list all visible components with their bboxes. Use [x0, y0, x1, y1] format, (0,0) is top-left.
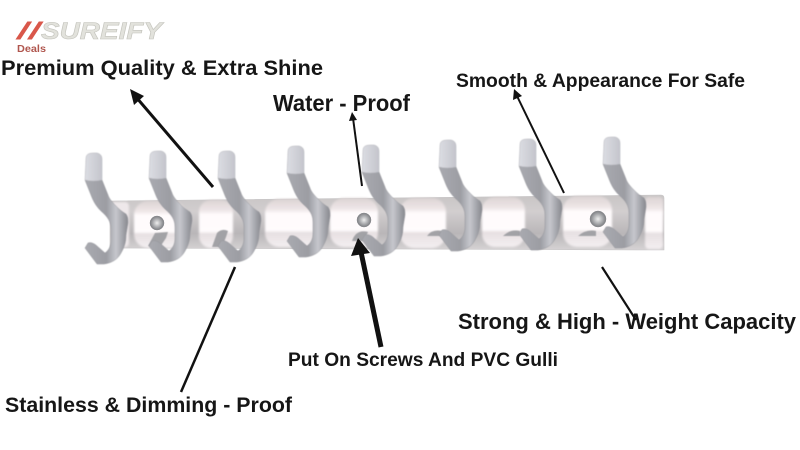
rear hook tips [148, 230, 596, 247]
hook 7 [519, 139, 562, 250]
screws [150, 216, 164, 230]
heading: screws: Put On Screws And PVC Gulli [288, 350, 558, 371]
rail highlights [111, 196, 663, 249]
rail plate [110, 195, 664, 250]
arrow: premium quality [130, 89, 213, 187]
hook 6 [439, 140, 482, 251]
heading: premium quality: Premium Quality & Extra Shine [1, 57, 323, 80]
line: stainless [181, 267, 235, 392]
heading: stainless: Stainless & Dimming - Proof [5, 394, 293, 417]
logo: Deals [17, 44, 46, 55]
hook 4 [287, 146, 330, 257]
heading: water proof: Water - Proof [273, 90, 410, 116]
hook 2 [149, 151, 192, 262]
hook 8 [603, 137, 646, 248]
arrow: screws [351, 238, 381, 347]
hook 3 [218, 151, 261, 262]
hook rail product [85, 137, 664, 264]
arrow: smooth appearance [513, 89, 564, 193]
hook 5 [362, 145, 405, 256]
logo [15, 18, 164, 55]
heading: smooth appearance: Smooth & Appearance For Safe [456, 71, 745, 92]
arrow: water proof [349, 112, 362, 186]
line: strong capacity [602, 267, 636, 320]
logo: // [15, 18, 44, 45]
hook 1 [85, 153, 128, 264]
logo: SUREIFY [41, 18, 164, 45]
heading: strong capacity: Strong & High - Weight Capacity [458, 309, 797, 334]
